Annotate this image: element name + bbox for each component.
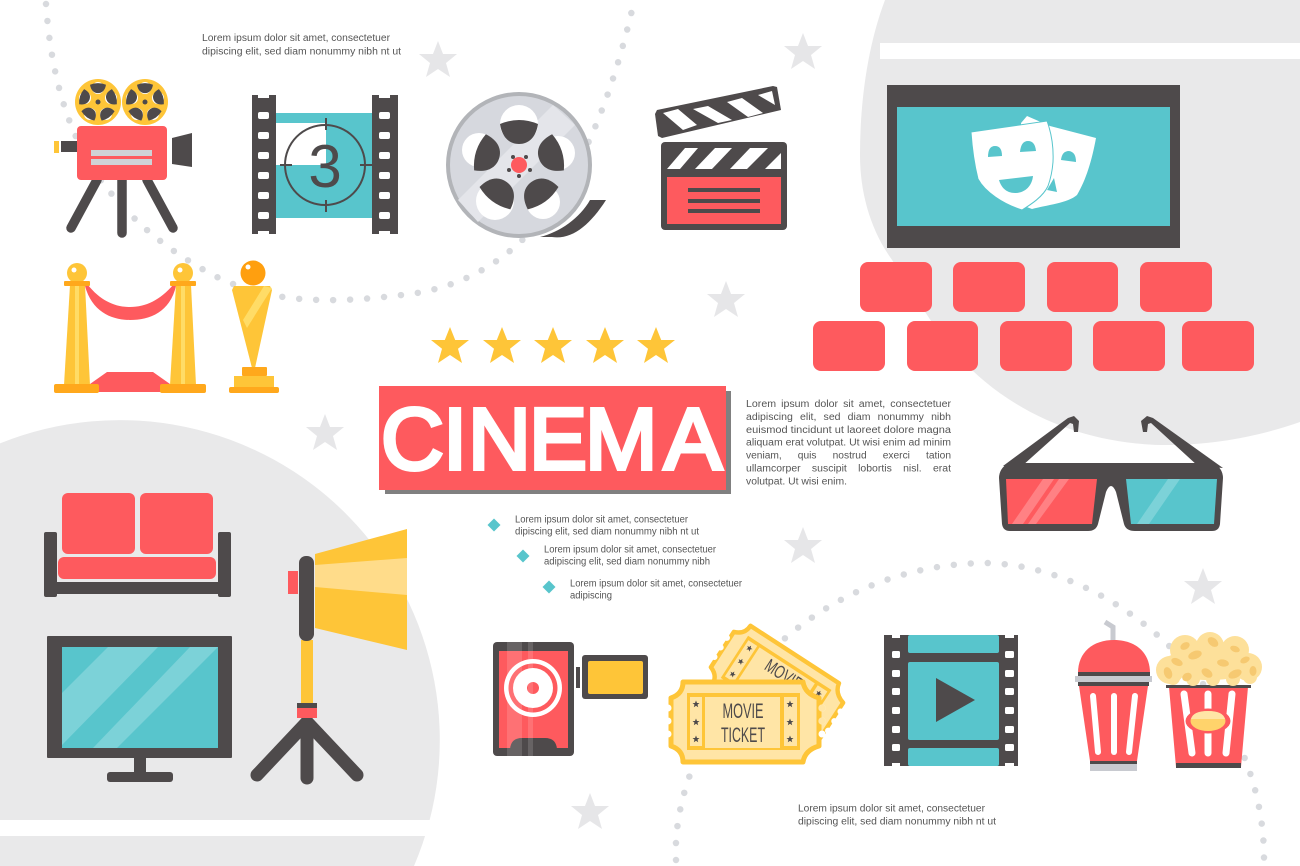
icon: soda cup — [1075, 622, 1152, 771]
front ticket — [664, 682, 826, 762]
screen display — [897, 107, 1170, 226]
panel: cinema screen and seats — [813, 85, 1254, 371]
icon: sofa — [44, 493, 231, 597]
icon: film strip with play button — [884, 635, 1018, 766]
bullet list: Lorem ipsum dolor sit amet, consectetuer — [570, 578, 743, 590]
icon: countdown film strip — [252, 95, 398, 234]
text block: paragraph: ullamcorper suscipit lobortis nisl. erat — [746, 464, 951, 474]
back ticket: MOVIE — [761, 655, 807, 694]
icon: movie tickets — [664, 617, 856, 762]
icon: film reel — [448, 94, 606, 237]
icon: clapperboard — [655, 86, 787, 230]
icon: award trophy — [229, 260, 279, 393]
icon: popcorn box — [1156, 632, 1262, 768]
icon: spotlight on tripod — [257, 529, 407, 778]
text block: bottom — [798, 804, 996, 828]
text block: paragraph: adipiscing elit, sed diam nonummy nibh — [746, 412, 951, 423]
text block: paragraph — [746, 399, 952, 488]
icon: countdown film strip: 3 — [308, 133, 342, 200]
bullet list: Lorem ipsum dolor sit amet, consectetuer — [544, 544, 717, 556]
decorative stars — [306, 33, 1222, 829]
title: cinema banner: CINEMA — [381, 391, 722, 488]
text block: paragraph: Lorem ipsum dolor sit amet, consectetuer — [746, 399, 952, 410]
front ticket: MOVIE — [722, 700, 764, 723]
text block: bottom: dipiscing elit, sed diam nonummy nibh nt ut — [798, 816, 996, 828]
text block: paragraph: euismod tincidunt ut laoreet dolore magna — [746, 425, 951, 436]
bullet list: adipiscing — [570, 590, 612, 602]
bullet list: Lorem ipsum dolor sit amet, consectetuer — [515, 514, 689, 526]
icon: television — [47, 636, 232, 782]
five rating stars — [431, 327, 675, 363]
background shape: top right — [860, 0, 1300, 445]
dotted path: bottom — [676, 563, 1264, 860]
text block: paragraph: aliquam erat volutpat. Ut wisi enim ad minim — [746, 438, 951, 448]
back ticket — [698, 617, 856, 753]
text block: top — [202, 33, 401, 58]
icon: theatre masks — [971, 116, 1096, 210]
icon: film projector — [54, 79, 192, 233]
front ticket: TICKET — [721, 724, 765, 747]
icon: 3D glasses — [999, 416, 1223, 531]
text block: paragraph: veniam, quis nostrud exerci tation — [746, 450, 951, 462]
text block: paragraph: volutpat. Ut wisi enim. — [746, 476, 847, 488]
screen frame — [887, 85, 1180, 248]
bullet list: adipiscing elit, sed diam nonummy nibh — [544, 556, 710, 568]
text block: bottom: Lorem ipsum dolor sit amet, consectetuer — [798, 804, 986, 814]
bullet list — [488, 514, 743, 602]
dotted path: top — [46, 4, 633, 300]
text block: top: dipiscing elit, sed diam nonummy nibh nt ut — [202, 46, 401, 58]
icon: red carpet rope barrier — [54, 263, 206, 393]
seats — [813, 262, 1254, 371]
text block: top: Lorem ipsum dolor sit amet, consectetuer — [202, 33, 391, 44]
bullet list: dipiscing elit, sed diam nonummy nibh nt ut — [515, 526, 699, 538]
background shape: bottom left — [0, 420, 440, 866]
icon: video camera — [493, 642, 648, 756]
